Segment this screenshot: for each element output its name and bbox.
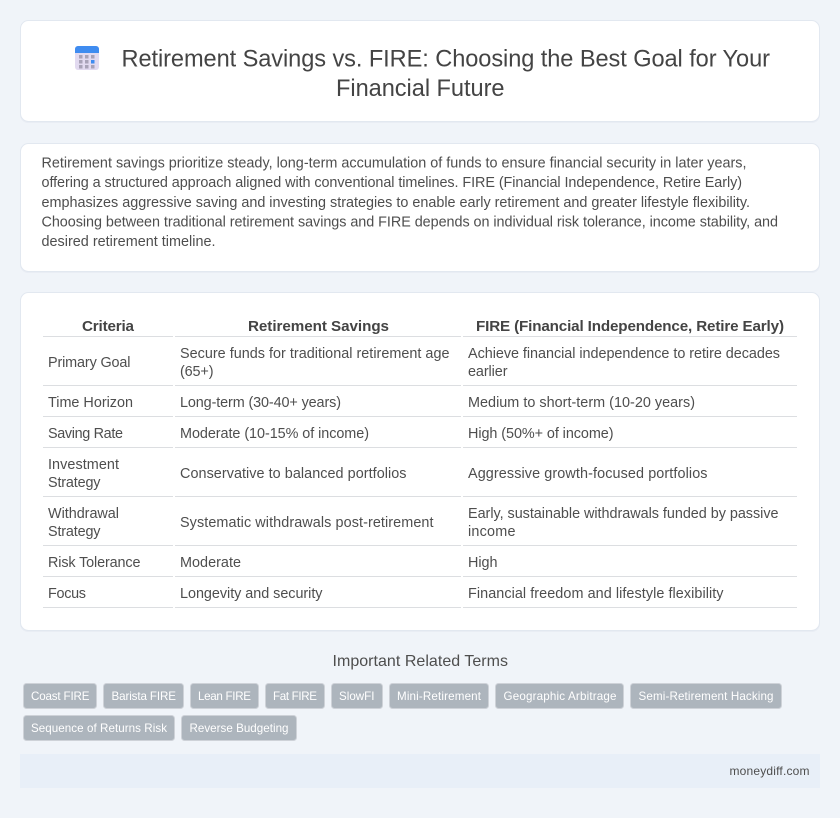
tags: related terms: Barista FIRE bbox=[112, 690, 176, 703]
panel: comparison table bbox=[20, 292, 820, 632]
row: time horizon: Time Horizon bbox=[48, 395, 133, 411]
row: saving rate: High (50%+ of income) bbox=[468, 426, 614, 442]
text block: introduction: desired retirement timeline. bbox=[42, 234, 216, 250]
row: investment strategy: Aggressive growth-focused portfolios bbox=[468, 466, 708, 482]
tags: related terms: Semi-Retirement Hacking bbox=[638, 690, 774, 703]
row: focus bbox=[48, 586, 724, 602]
tags: related terms: SlowFI bbox=[339, 690, 374, 703]
row: withdrawal strategy: Early, sustainable withdrawals funded by passive bbox=[468, 506, 778, 522]
text block: introduction: Retirement savings prioritize steady, long-term accumulation of funds to ensure financial security in later years, bbox=[42, 156, 746, 172]
row: withdrawal strategy: Strategy bbox=[48, 524, 101, 540]
row: withdrawal strategy: Withdrawal bbox=[48, 506, 119, 522]
row: saving rate: Moderate (10-15% of income) bbox=[180, 426, 369, 442]
tags: related terms: Geographic Arbitrage bbox=[504, 690, 616, 703]
row: primary goal: (65+) bbox=[180, 364, 214, 380]
panel: header bbox=[20, 20, 820, 123]
row: withdrawal strategy bbox=[48, 506, 778, 540]
text block: introduction: offering a structured approach aligned with conventional timelines. FIRE (Financial Independence, Retire Early) bbox=[42, 175, 742, 191]
tags: related terms: Fat FIRE bbox=[273, 690, 317, 703]
tags: related terms: Reverse Budgeting bbox=[190, 722, 288, 735]
heading: related terms: Important Related Terms bbox=[332, 653, 508, 670]
row: primary goal: Achieve financial independence to retire decades bbox=[468, 346, 780, 362]
row: risk tolerance: Risk Tolerance bbox=[48, 555, 140, 571]
row: investment strategy: Investment bbox=[48, 457, 119, 473]
row: focus: Focus bbox=[48, 586, 86, 602]
footer: moneydiff.com bbox=[730, 764, 810, 778]
row: investment strategy: Strategy bbox=[48, 475, 101, 491]
row: withdrawal strategy: income bbox=[468, 524, 516, 540]
row: risk tolerance bbox=[48, 555, 498, 571]
text block: introduction bbox=[42, 156, 778, 250]
table header: Retirement Savings bbox=[248, 318, 389, 335]
tags: related terms: Lean FIRE bbox=[198, 690, 251, 703]
icon: calendar bbox=[75, 46, 99, 70]
row: primary goal bbox=[48, 346, 780, 380]
row: primary goal: Secure funds for traditional retirement age bbox=[180, 346, 450, 362]
footer bbox=[20, 754, 820, 788]
table header: FIRE (Financial Independence, Retire Early) bbox=[476, 318, 784, 335]
row: primary goal: Primary Goal bbox=[48, 355, 130, 371]
tags: related terms bbox=[24, 684, 782, 740]
row: risk tolerance: Moderate bbox=[180, 555, 241, 571]
row: risk tolerance: High bbox=[468, 555, 498, 571]
row: withdrawal strategy: Systematic withdrawals post-retirement bbox=[180, 515, 434, 531]
tags: related terms: Mini-Retirement bbox=[397, 690, 482, 703]
title bbox=[122, 46, 770, 102]
row: focus: Financial freedom and lifestyle flexibility bbox=[468, 586, 724, 602]
row: primary goal: earlier bbox=[468, 364, 508, 380]
table header: Criteria bbox=[82, 318, 135, 335]
row: saving rate: Saving Rate bbox=[48, 426, 123, 442]
table header bbox=[82, 318, 784, 335]
row: time horizon: Medium to short-term (10-20 years) bbox=[468, 395, 695, 411]
tags: related terms: Coast FIRE bbox=[31, 690, 90, 703]
text block: introduction: emphasizes aggressive saving and investing strategies to enable early retirement and greater lifestyle flexibility. bbox=[42, 195, 750, 211]
tags: related terms: Sequence of Returns Risk bbox=[31, 722, 167, 735]
row: investment strategy: Conservative to balanced portfolios bbox=[180, 466, 406, 482]
text block: introduction: Choosing between traditional retirement savings and FIRE depends on individual risk tolerance, income stability, and bbox=[42, 214, 778, 230]
row: time horizon bbox=[48, 395, 695, 411]
row: saving rate bbox=[48, 426, 614, 442]
row: investment strategy bbox=[48, 457, 708, 491]
row: focus: Longevity and security bbox=[180, 586, 323, 602]
title: Financial Future bbox=[336, 76, 504, 102]
row: time horizon: Long-term (30-40+ years) bbox=[180, 395, 341, 411]
title: Retirement Savings vs. FIRE: Choosing the Best Goal for Your bbox=[122, 46, 770, 72]
panel: introduction bbox=[20, 144, 820, 273]
